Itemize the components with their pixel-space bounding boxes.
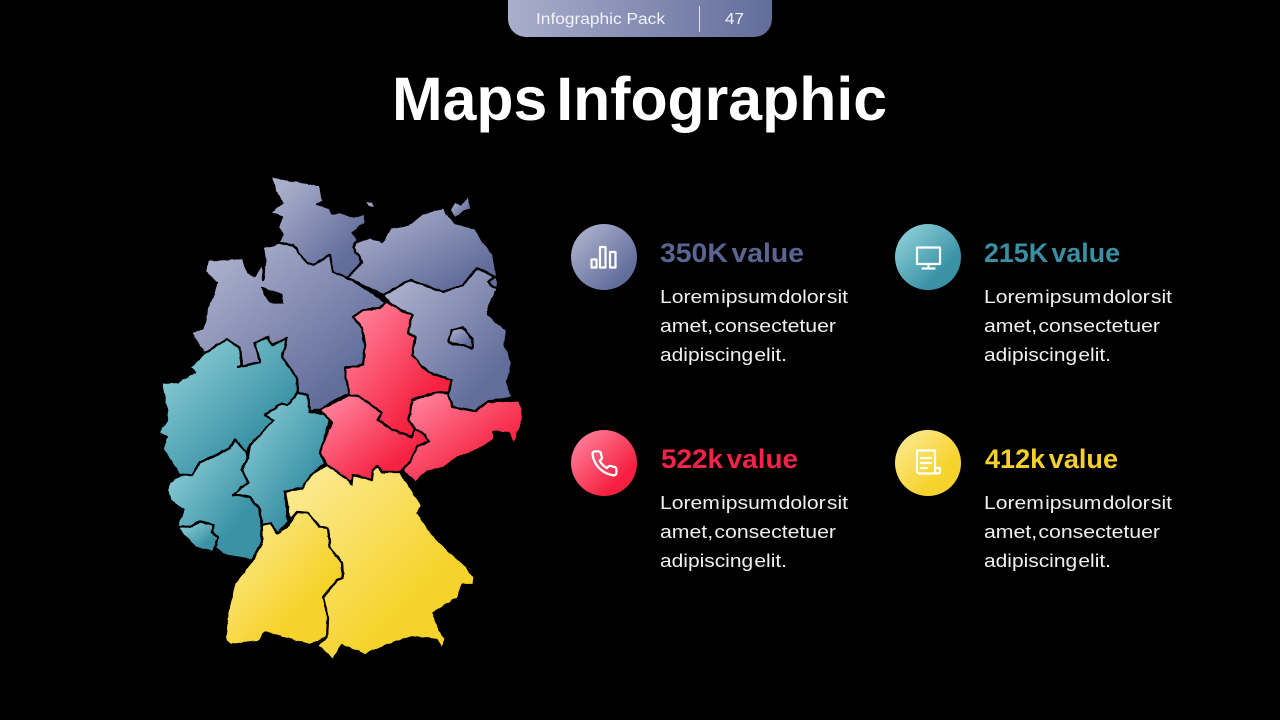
body text: Lorem ipsum dolor sit [660, 492, 848, 513]
body text: adipiscing elit. [660, 344, 787, 365]
region: Lower Saxony [191, 243, 385, 412]
region: North Rhine-Westphalia [158, 337, 298, 475]
body text: Lorem ipsum dolor sit [984, 286, 1172, 307]
body text: adipiscing elit. [984, 344, 1111, 365]
icon: bar chart [571, 224, 637, 290]
stat card: 522k value [571, 430, 848, 571]
heading: 522k value [661, 444, 798, 474]
region: Schleswig-Holstein [270, 176, 365, 277]
body text: amet, consectetuer [660, 315, 836, 336]
heading: 412k value [985, 444, 1118, 474]
header pill: 47 [725, 11, 744, 28]
stat card: 215K value [895, 224, 1172, 365]
island: Rügen [451, 198, 470, 217]
body text: adipiscing elit. [660, 550, 787, 571]
header pill [508, 0, 772, 37]
region: Brandenburg [383, 268, 512, 411]
header pill: Infographic Pack [536, 11, 665, 28]
region: Mecklenburg-Vorpommern [348, 208, 498, 295]
body text [660, 286, 848, 365]
heading: 215K value [984, 238, 1120, 268]
region: Saarland [177, 522, 218, 552]
island: Fehmarn [366, 202, 374, 207]
body text [984, 286, 1172, 365]
region: Thuringia [320, 395, 429, 483]
body text [984, 492, 1172, 571]
stat card: 350K value [571, 224, 848, 365]
body text: amet, consectetuer [660, 521, 836, 542]
body text: Lorem ipsum dolor sit [984, 492, 1172, 513]
icon: document [895, 430, 961, 496]
region: Bavaria [285, 465, 474, 660]
body text: amet, consectetuer [984, 521, 1160, 542]
body text: Lorem ipsum dolor sit [660, 286, 848, 307]
body text: amet, consectetuer [984, 315, 1160, 336]
heading: 350K value [660, 238, 804, 268]
region: Berlin [448, 327, 473, 348]
region: Saxony-Anhalt [345, 302, 452, 437]
icon: phone [571, 430, 637, 496]
region: Baden-Württemberg [225, 512, 343, 645]
icon: monitor [895, 224, 961, 290]
region: Saxony [402, 392, 523, 482]
title: Maps Infographic [392, 65, 887, 133]
stat card: 412k value [895, 430, 1172, 571]
body text: adipiscing elit. [984, 550, 1111, 571]
body text [660, 492, 848, 571]
map of Germany [158, 176, 523, 660]
region: Hesse [233, 393, 330, 533]
region: Rhineland-Palatinate [167, 440, 262, 560]
